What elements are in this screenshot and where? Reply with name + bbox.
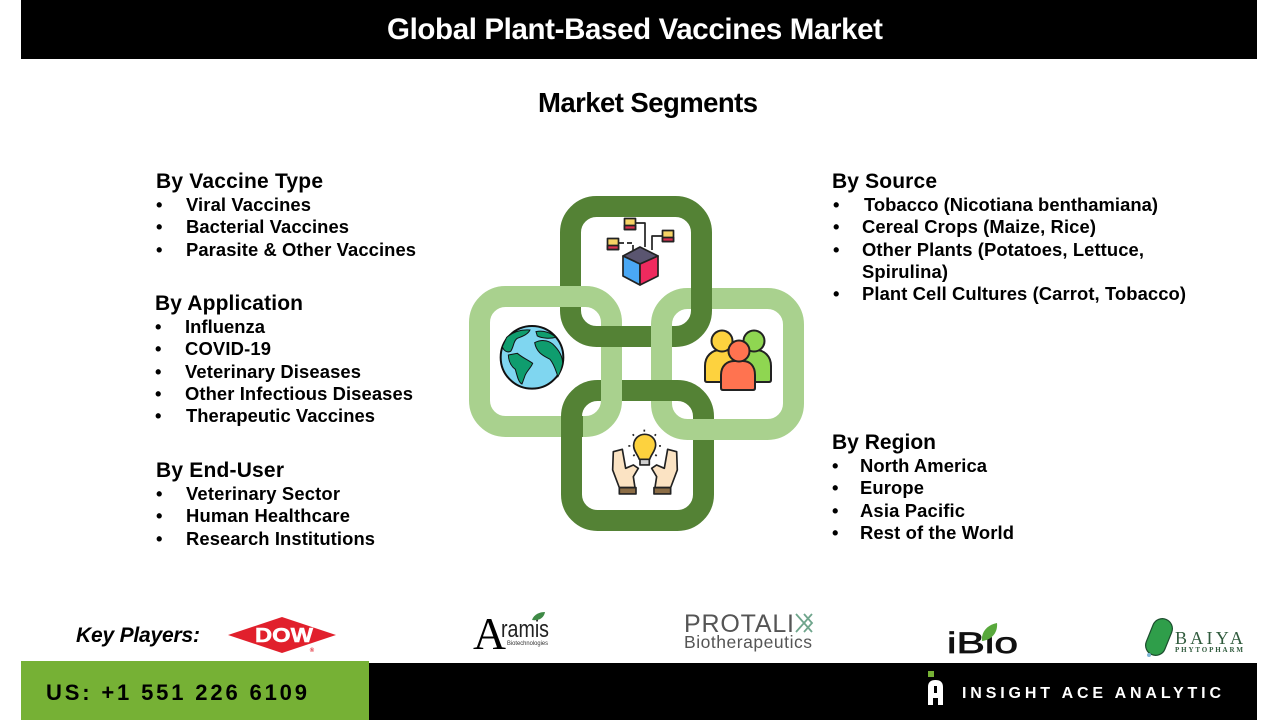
segment list: by source: • [833,239,839,260]
segment list: by source: Plant Cell Cultures (Carrot, Tobacco) [862,283,1186,304]
segment list: by source [832,170,1186,304]
logo: Protalix: Biotherapeutics [684,632,812,652]
logo: Dow: DOW [255,625,313,647]
interlocking rings diagram [480,206,794,520]
segment list: by source: Tobacco (Nicotiana benthamiana) [864,194,1158,215]
segment list: by region: • [832,500,838,521]
segment list: by vaccine type: • [156,216,162,237]
segment list: by vaccine type: Bacterial Vaccines [186,216,349,237]
logo: Protalix: PROTALI [684,610,794,638]
logo: Protalix [684,610,812,652]
icon: hands holding light bulb [613,430,677,494]
title banner: Global Plant-Based Vaccines Market [387,13,883,46]
segment list: by vaccine type: Viral Vaccines [186,194,311,215]
segment list: by vaccine type [156,170,416,260]
logo: Dow: ® [310,647,315,654]
label: key players: Key Players: [76,624,200,647]
logo: Baiya Phytopharm: BAIYA [1175,628,1243,648]
segment list: by source: Cereal Crops (Maize, Rice) [862,216,1096,237]
segment list: by application: Veterinary Diseases [185,361,361,382]
segment list: by end-user: Research Institutions [186,528,375,549]
logo: Baiya Phytopharm: PHYTOPHARM [1175,646,1243,654]
segment list: by application: • [155,316,161,337]
heading: market segments: Market Segments [538,87,758,118]
segment list: by region: Asia Pacific [860,500,965,521]
segment list: by application: Other Infectious Diseases [185,383,413,404]
segment list: by region: Rest of the World [860,522,1014,543]
segment list: by application: • [155,361,161,382]
logo: iBio: iBio [947,627,1018,660]
segment list: by application: • [155,405,161,426]
segment list: by region: • [832,477,838,498]
logo: Insight Ace Analytic: INSIGHT ACE ANALYTIC [962,685,1221,702]
logo: Baiya Phytopharm [1143,616,1243,658]
segment list: by source: Spirulina) [862,261,948,282]
segment list: by region: By Region [832,431,936,454]
segment list: by vaccine type: • [156,194,162,215]
segment list: by application: • [155,383,161,404]
segment list: by end-user: • [156,528,162,549]
title banner [21,0,1257,59]
footer bar: black [369,663,1257,720]
segment list: by application [155,292,413,426]
segment list: by source: • [833,283,839,304]
logo: Aramis [473,608,549,659]
segment list: by region [832,431,1014,543]
segment list: by source: • [833,194,839,215]
segment list: by vaccine type: Parasite & Other Vaccines [186,239,416,260]
segment list: by end-user: • [156,505,162,526]
segment list: by source: By Source [832,170,937,193]
icon: data cube [608,218,674,285]
segment list: by source: • [833,216,839,237]
logo: Aramis: ramis [501,616,549,643]
segment list: by end-user [156,459,375,549]
segment list: by vaccine type: • [156,239,162,260]
segment list: by application: • [155,338,161,359]
logo: Dow [228,617,336,654]
segment list: by vaccine type: By Vaccine Type [156,170,323,193]
logo: Aramis: Biotechnologies [507,641,548,647]
segment list: by source: Other Plants (Potatoes, Lettuce, [862,239,1144,260]
segment list: by end-user: • [156,483,162,504]
segment list: by application: Influenza [185,316,266,337]
icon: globe [501,326,563,389]
segment list: by end-user: By End-User [156,459,284,482]
logo: Aramis: A [473,608,506,659]
segment list: by end-user: Veterinary Sector [186,483,340,504]
segment list: by region: • [832,455,838,476]
footer contact panel: phone [21,661,369,720]
icon: group of people [705,330,771,390]
segment list: by region: • [832,522,838,543]
logo: iBio [947,623,1018,660]
logo: Insight Ace Analytic [928,671,1221,705]
segment list: by application: Therapeutic Vaccines [186,405,375,426]
segment list: by region: North America [860,455,988,476]
segment list: by application: By Application [155,292,303,315]
segment list: by end-user: Human Healthcare [186,505,350,526]
footer contact panel: phone: US: +1 551 226 6109 [46,680,307,705]
segment list: by region: Europe [860,477,924,498]
segment list: by application: COVID-19 [185,338,271,359]
